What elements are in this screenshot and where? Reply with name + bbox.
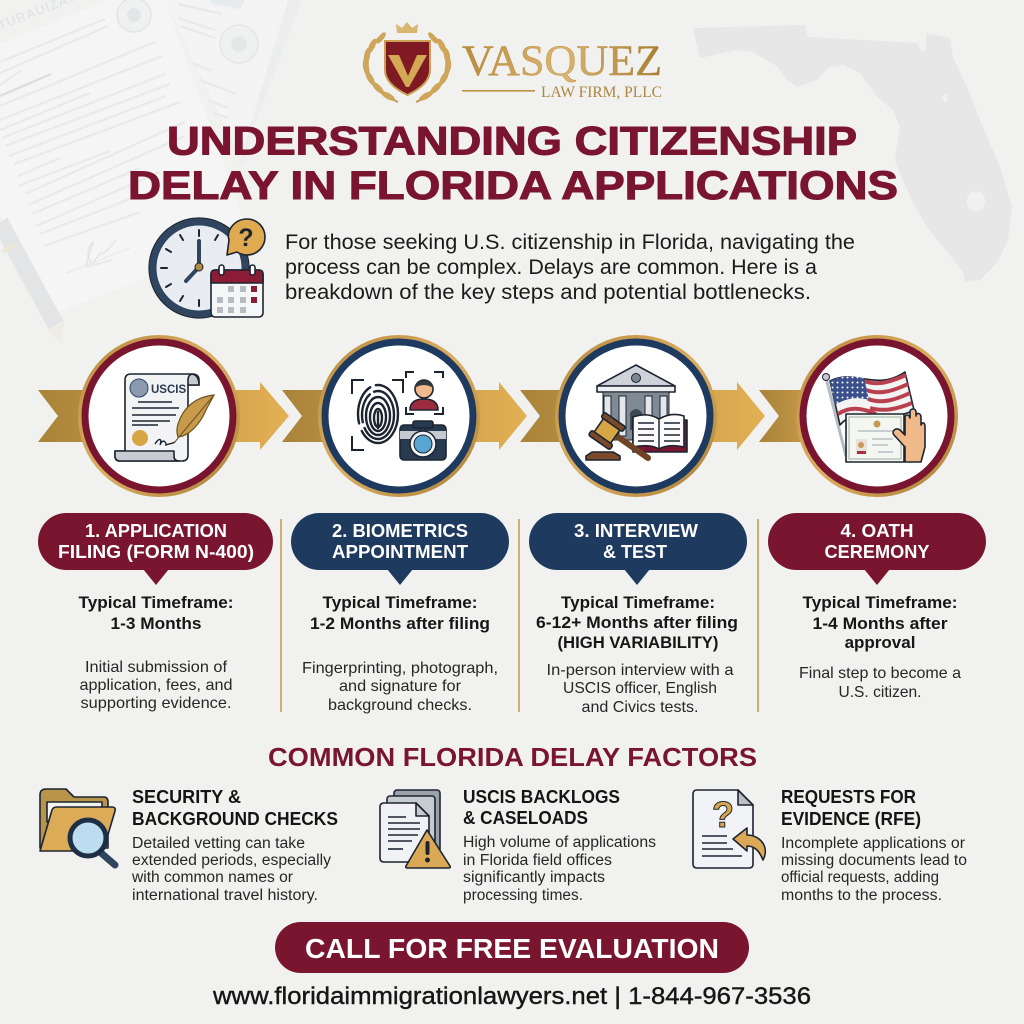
step 3 timeframe xyxy=(536,593,738,652)
step 1 panel xyxy=(38,513,273,712)
step 2 panel xyxy=(291,513,509,714)
factor 3 description: months to the process. xyxy=(781,887,942,904)
step 2 description xyxy=(302,660,498,714)
intro text: For those seeking U.S. citizenship in Florida, navigating the xyxy=(285,230,855,254)
factor 1 description: international travel history. xyxy=(132,887,318,904)
step 3 timeframe: Typical Timeframe: xyxy=(561,593,715,612)
step 2 description: and signature for xyxy=(339,678,462,695)
title xyxy=(128,120,898,208)
factor 3 description: missing documents lead to xyxy=(781,852,967,869)
shield V xyxy=(388,55,427,87)
step 1 heading pill: FILING (FORM N-400) xyxy=(58,541,254,562)
step 3 panel xyxy=(529,513,747,716)
title: DELAY IN FLORIDA APPLICATIONS xyxy=(128,164,898,208)
wreath xyxy=(362,31,452,103)
factor 1 description: Detailed vetting can take xyxy=(132,835,305,852)
step 2 description: Fingerprinting, photograph, xyxy=(302,660,498,677)
factor 2 description xyxy=(463,834,656,904)
factor 1 heading: BACKGROUND CHECKS xyxy=(132,809,338,829)
background: Florida map silhouette xyxy=(693,25,1012,282)
intro text xyxy=(285,230,855,304)
step 4 circle icon: flag, certificate and raised hand xyxy=(796,335,958,497)
step 1 heading pill xyxy=(38,513,273,585)
step 4 timeframe: approval xyxy=(845,633,915,652)
factor 2: USCIS backlogs and caseloads xyxy=(380,787,656,904)
factor 2 description: High volume of applications xyxy=(463,834,656,851)
step 4 description: U.S. citizen. xyxy=(838,684,922,701)
factor 1 heading xyxy=(132,787,338,829)
step 1 timeframe: 1-3 Months xyxy=(110,614,202,633)
step 4 timeframe: Typical Timeframe: xyxy=(802,593,958,612)
step 3 heading pill xyxy=(529,513,747,585)
icon: document with question and return arrow xyxy=(693,790,765,868)
call to action button xyxy=(275,922,749,973)
step 1 description xyxy=(80,659,232,712)
step 2 timeframe: Typical Timeframe: xyxy=(322,593,478,612)
factor 3 description: official requests, adding xyxy=(781,869,939,886)
logo wordmark: LAW FIRM, PLLC xyxy=(541,84,662,101)
factor 3 description: Incomplete applications or xyxy=(781,835,965,852)
contact line: www.floridaimmigrationlawyers.net | 1-844-967-3536 xyxy=(212,983,811,1010)
step 2 heading pill: APPOINTMENT xyxy=(332,541,469,562)
step 1 circle icon: USCIS document and quill xyxy=(78,335,240,497)
icon: document stack with warning xyxy=(380,790,450,868)
process arrows xyxy=(38,382,860,450)
step 3 heading pill: & TEST xyxy=(603,541,668,562)
factor 2 description: processing times. xyxy=(463,887,583,904)
factor 3 description xyxy=(781,835,967,904)
step 4 heading pill xyxy=(768,513,986,585)
shield xyxy=(385,41,430,95)
step 3 heading pill: 3. INTERVIEW xyxy=(574,520,699,541)
step 3 description: USCIS officer, English xyxy=(563,680,717,697)
icon: clock, calendar and question bubble: ? xyxy=(238,224,254,252)
factor 2 heading xyxy=(463,787,620,828)
step 3 timeframe: 6-12+ Months after filing xyxy=(536,613,738,632)
step 4 panel xyxy=(768,513,986,701)
factor 2 description: in Florida field offices xyxy=(463,852,612,869)
factor 2 heading: & CASELOADS xyxy=(463,808,588,828)
factor 3 heading xyxy=(781,787,921,829)
factor 1 description xyxy=(131,835,331,904)
step 4 description: Final step to become a xyxy=(799,665,961,682)
logo: Vasquez Law Firm xyxy=(362,22,662,103)
factor 1 description: with common names or xyxy=(131,869,293,886)
step 4 heading pill: 4. OATH xyxy=(840,520,914,541)
crown xyxy=(396,22,418,33)
section heading: common Florida delay factors: COMMON FLORIDA DELAY FACTORS xyxy=(268,742,757,772)
step 2 heading pill xyxy=(291,513,509,585)
factor 1: security and background checks xyxy=(40,787,338,904)
call to action button: CALL FOR FREE EVALUATION xyxy=(305,933,719,964)
step 1 description: application, fees, and xyxy=(80,677,232,694)
step 4 heading pill: CEREMONY xyxy=(824,541,930,562)
step 3 circle icon: courthouse, gavel and book xyxy=(555,335,717,497)
icon: document with question and return arrow: ? xyxy=(712,794,734,835)
step 2 circle icon: fingerprint, portrait and camera xyxy=(318,335,480,497)
factor 2 description: significantly impacts xyxy=(463,869,605,886)
logo wordmark: VASQUEZ xyxy=(462,38,662,85)
factor 3: requests for evidence xyxy=(693,787,967,904)
factor 1 heading: SECURITY & xyxy=(132,787,241,807)
step 3 description: In-person interview with a xyxy=(546,662,734,679)
step 1 circle icon: USCIS document and quill: USCIS xyxy=(151,384,186,396)
logo emblem xyxy=(362,22,452,103)
title: UNDERSTANDING CITIZENSHIP xyxy=(167,120,857,164)
step 1 timeframe xyxy=(78,593,234,633)
background: naturalization documents and pen xyxy=(0,0,302,345)
factor 3 heading: EVIDENCE (RFE) xyxy=(781,809,921,829)
step 1 description: Initial submission of xyxy=(85,659,228,676)
icon: clock, calendar and question bubble xyxy=(149,218,265,318)
step 2 heading pill: 2. BIOMETRICS xyxy=(332,520,468,541)
step 3 timeframe: (HIGH VARIABILITY) xyxy=(558,633,718,652)
step 1 timeframe: Typical Timeframe: xyxy=(78,593,234,612)
intro text: process can be complex. Delays are common. Here is a xyxy=(285,255,817,279)
factor 3 heading: REQUESTS FOR xyxy=(781,787,916,807)
step 3 description xyxy=(546,662,734,716)
factor 1 description: extended periods, especially xyxy=(132,852,331,869)
step 1 heading pill: 1. APPLICATION xyxy=(85,520,227,541)
step 2 description: background checks. xyxy=(328,697,472,714)
step 2 timeframe: 1-2 Months after filing xyxy=(310,614,490,633)
step 4 timeframe: 1-4 Months after xyxy=(812,614,948,633)
step 4 description xyxy=(799,665,961,701)
step 1 description: supporting evidence. xyxy=(80,695,232,712)
intro text: breakdown of the key steps and potential bottlenecks. xyxy=(285,280,811,304)
factor 2 heading: USCIS BACKLOGS xyxy=(463,787,620,807)
step 3 description: and Civics tests. xyxy=(582,699,698,716)
step 4 timeframe xyxy=(802,593,958,652)
step 2 timeframe xyxy=(310,593,490,633)
icon: folder with magnifier xyxy=(40,789,115,865)
